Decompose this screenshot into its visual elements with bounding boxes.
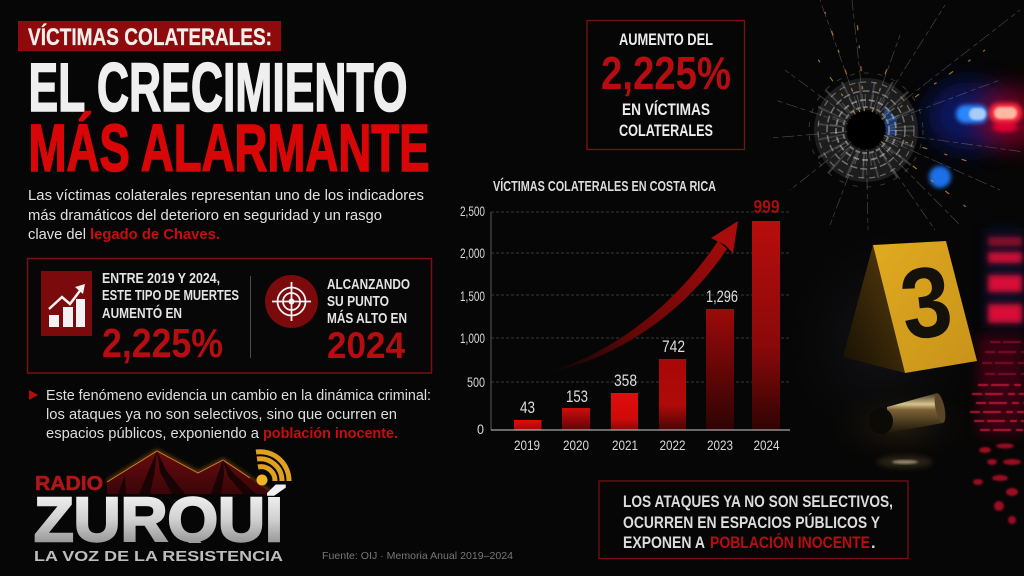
bullet text: los ataques ya no son selectivos, sino que ocurren en [46, 407, 397, 423]
bullet text [29, 388, 431, 442]
callout: aumento del 2,225%: COLATERALES [619, 122, 713, 140]
arrow: upward trend [540, 221, 738, 374]
stat text: 2,225%: ESTE TIPO DE MUERTES [102, 287, 239, 304]
callout: aumento del 2,225%: EN VÍCTIMAS [622, 100, 710, 119]
bars [514, 221, 780, 430]
stat text: 2,225%: AUMENTÓ EN [102, 304, 182, 322]
callout: aumento del 2,225%: 2,225% [601, 47, 731, 99]
y axis labels: 2,000 [460, 245, 485, 261]
source note: Fuente: OIJ · Memoria Anual 2019–2024 [322, 550, 513, 562]
tag: víctimas colaterales: VÍCTIMAS COLATERALES: [28, 23, 272, 51]
callout: ataques en espacios públicos: POBLACIÓN INOCENTE [710, 533, 870, 552]
year labels: 2020 [563, 437, 589, 453]
value labels: 43 [520, 398, 535, 417]
y axis labels: 0 [477, 421, 484, 437]
chart title: VÍCTIMAS COLATERALES EN COSTA RICA [493, 178, 716, 195]
icon: rising bar chart [41, 271, 92, 336]
value labels: 153 [566, 387, 588, 406]
title [28, 49, 430, 186]
year labels: 2023 [707, 437, 733, 453]
bullet text: espacios públicos, exponiendo a [46, 426, 260, 442]
callout: ataques en espacios públicos [599, 481, 908, 558]
stat text: 2,225%: 2,225% [102, 320, 223, 366]
photo: evidence marker number 3: 3 [894, 244, 958, 362]
intro text [28, 188, 424, 243]
stat text: 2024: 2024 [327, 325, 405, 366]
value labels [520, 197, 780, 417]
photo: blurred police lights [928, 82, 1024, 188]
value labels: 358 [614, 371, 637, 390]
bullet text: Este fenómeno evidencia un cambio en la dinámica criminal: [46, 388, 431, 404]
callout: aumento del 2,225%: AUMENTO DEL [619, 31, 713, 49]
year labels: 2024 [754, 437, 780, 453]
y axis labels: 1,000 [460, 330, 485, 346]
stat text: 2024: ALCANZANDO [327, 276, 410, 293]
callout: ataques en espacios públicos: OCURREN EN ESPACIOS PÚBLICOS Y [623, 513, 880, 532]
photo: wet floor and red reflections [770, 210, 1024, 524]
year labels: 2022 [660, 437, 686, 453]
y axis labels [460, 203, 485, 437]
bullet text: población inocente. [263, 426, 398, 442]
photo: bullet casing [869, 392, 948, 468]
callout: ataques en espacios públicos: LOS ATAQUES YA NO SON SELECTIVOS, [623, 493, 893, 511]
y axis labels: 1,500 [460, 288, 485, 304]
intro text: Las víctimas colaterales representan uno de los indicadores [28, 188, 424, 204]
logo: Radio Zurquí [34, 451, 289, 565]
logo: Radio Zurquí: ZURQUÍ [34, 486, 285, 555]
value labels: 742 [662, 337, 685, 356]
stat text: 2024: MÁS ALTO EN [327, 310, 407, 327]
stat text: 2024: SU PUNTO [327, 293, 389, 310]
bar chart [460, 197, 790, 453]
photo: shattered glass with bullet hole [770, 0, 1024, 230]
logo: Radio Zurquí: RADIO [35, 472, 103, 495]
year labels: 2019 [514, 437, 540, 453]
icon: target [265, 275, 318, 328]
y axis labels: 2,500 [460, 203, 485, 219]
intro text: legado de Chaves. [90, 227, 220, 243]
y axis labels: 500 [467, 374, 485, 390]
stat text: 2024 [327, 276, 410, 366]
callout: aumento del 2,225% [587, 20, 744, 150]
intro text: más dramáticos del deterioro en seguridad y un rasgo [28, 208, 382, 224]
logo: Radio Zurquí: LA VOZ DE LA RESISTENCIA [34, 549, 284, 565]
callout: ataques en espacios públicos: . [871, 534, 876, 552]
year labels: 2021 [612, 437, 638, 453]
year labels [514, 437, 780, 453]
stat text: 2,225% [102, 270, 239, 366]
intro text: clave del [28, 227, 86, 243]
logo icon: radio waves [256, 452, 289, 486]
value labels: 999 [754, 197, 780, 217]
callout: ataques en espacios públicos: EXPONEN A [623, 534, 705, 552]
photo: evidence marker number 3 [843, 241, 977, 373]
panel: key statistics [28, 258, 432, 373]
title: MÁS ALARMANTE [28, 111, 430, 186]
title: EL CRECIMIENTO [28, 49, 408, 126]
value labels: 1,296 [706, 287, 738, 306]
stat text: 2,225%: ENTRE 2019 Y 2024, [102, 270, 220, 287]
